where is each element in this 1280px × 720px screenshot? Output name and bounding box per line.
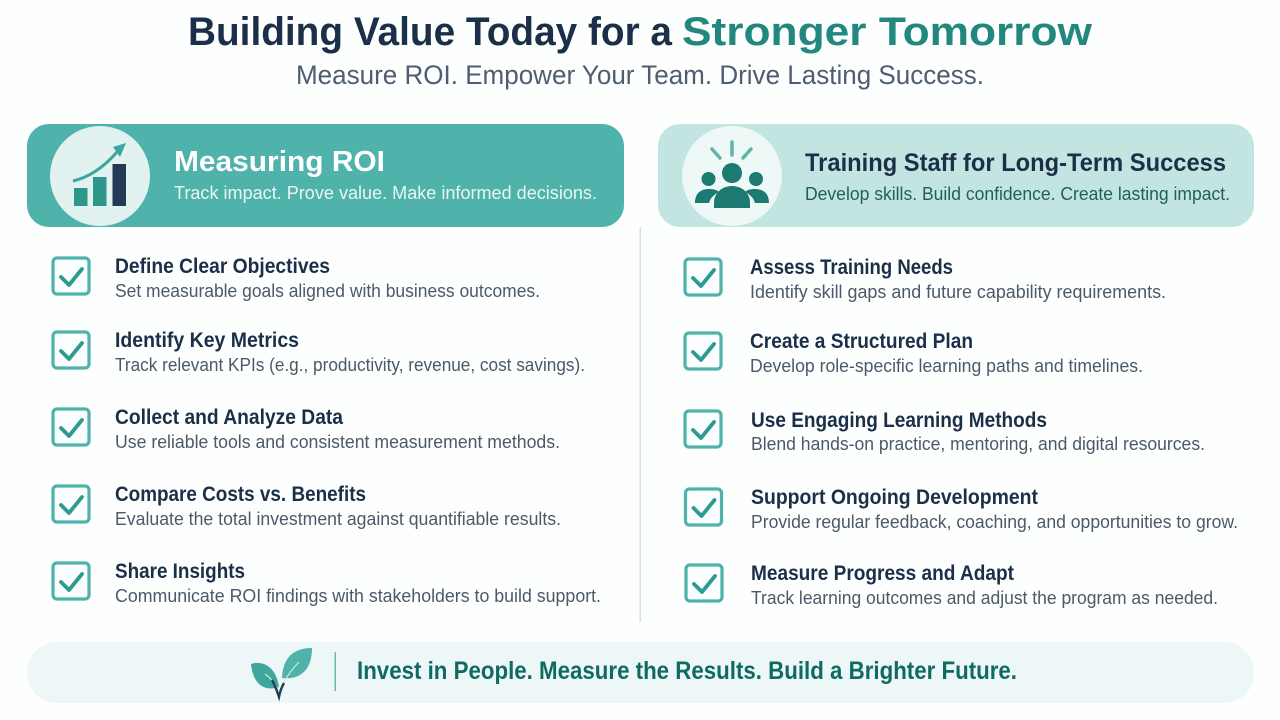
item: support ongoing development: Support Ongoing Development <box>751 486 1038 509</box>
item: share insights: Share Insights <box>115 560 245 583</box>
item: define clear objectives: Define Clear Objectives <box>115 255 330 278</box>
item: assess training needs: Assess Training Needs <box>750 256 953 279</box>
divider between columns <box>640 227 641 622</box>
item: support ongoing development: Provide regular feedback, coaching, and opportunities to grow. <box>751 512 1238 532</box>
tagline: Develop skills. Build confidence. Create lasting impact. <box>805 184 1230 204</box>
footer message: Invest in People. Measure the Results. Build a Brighter Future. <box>357 657 1017 685</box>
tagline: Track impact. Prove value. Make informed decisions. <box>174 182 597 203</box>
item: collect and analyze data: Collect and Analyze Data <box>115 406 343 429</box>
item: identify key metrics: Identify Key Metrics <box>115 329 299 352</box>
panel: training staff header <box>658 124 1254 227</box>
icon: rising bar chart <box>50 126 150 226</box>
item: assess training needs <box>685 256 1166 302</box>
item: collect and analyze data <box>53 406 560 452</box>
item: measure progress and adapt: Measure Progress and Adapt <box>751 562 1014 585</box>
footer banner <box>27 642 1254 703</box>
item: assess training needs: Identify skill gaps and future capability requirements. <box>750 282 1166 302</box>
item: use engaging learning methods: Blend hands-on practice, mentoring, and digital resources. <box>751 434 1205 454</box>
heading: Measuring ROI: Measuring ROI <box>174 146 385 178</box>
item: support ongoing development <box>686 486 1238 532</box>
item: compare costs vs benefits <box>53 483 561 529</box>
icon: sprout <box>251 648 312 697</box>
title: Building Value Today for a <box>188 10 673 54</box>
item: measure progress and adapt: Track learning outcomes and adjust the program as needed. <box>751 588 1218 608</box>
item: use engaging learning methods: Use Engaging Learning Methods <box>751 409 1047 432</box>
item: use engaging learning methods <box>685 409 1205 454</box>
item: define clear objectives: Set measurable goals aligned with business outcomes. <box>115 281 540 301</box>
title <box>188 10 1093 54</box>
item: create a structured plan: Develop role-specific learning paths and timelines. <box>750 356 1143 376</box>
list: ROI steps <box>53 255 601 606</box>
footer divider <box>334 652 336 691</box>
panel: measuring ROI header <box>27 124 624 227</box>
item: measure progress and adapt <box>686 562 1218 608</box>
list: training steps <box>685 256 1238 608</box>
item: compare costs vs benefits: Compare Costs vs. Benefits <box>115 483 366 506</box>
title: Stronger Tomorrow <box>682 10 1093 54</box>
item: collect and analyze data: Use reliable tools and consistent measurement methods. <box>115 432 560 452</box>
item: share insights: Communicate ROI findings with stakeholders to build support. <box>115 586 601 606</box>
icon: team of people <box>682 126 782 226</box>
item: share insights <box>53 560 601 606</box>
item: identify key metrics <box>53 329 585 375</box>
item: create a structured plan <box>685 330 1143 376</box>
heading: training staff: Training Staff for Long-Term Success <box>805 149 1226 177</box>
subtitle: Measure ROI. Empower Your Team. Drive Lasting Success. <box>296 60 984 90</box>
item: identify key metrics: Track relevant KPIs (e.g., productivity, revenue, cost savings). <box>115 355 585 375</box>
item: create a structured plan: Create a Structured Plan <box>750 330 973 353</box>
item: compare costs vs benefits: Evaluate the total investment against quantifiable results. <box>115 509 561 529</box>
item: define clear objectives <box>53 255 540 301</box>
